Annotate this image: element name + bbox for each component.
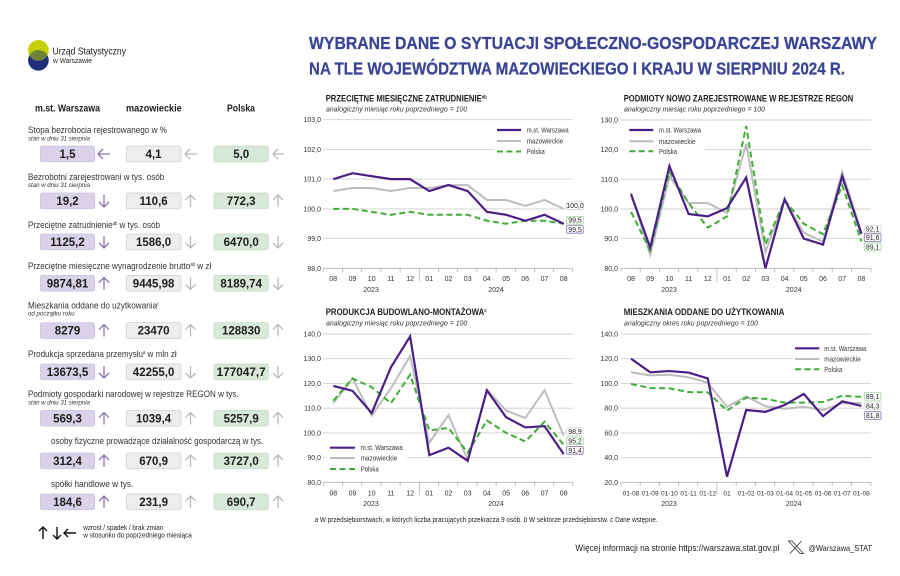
row: bezrobotni zarejestrowani (28, 172, 283, 209)
chart: produkcja budowlano-montażowa: 07 (541, 490, 548, 497)
chart: podmioty nowo zarejestrowane: 07 (838, 276, 846, 283)
row: osoby fizyczne: 312,4 (53, 456, 82, 468)
chart: produkcja budowlano-montażowa: mazowieckie (361, 454, 397, 462)
chart: przeciętne miesięczne zatrudnienie: 102,0 (303, 147, 321, 154)
row: osoby fizyczne: 3727,0 (224, 456, 259, 468)
chart: produkcja budowlano-montażowa: 98,9 (568, 429, 582, 436)
chart: mieszkania oddane do użytkowania: Polska (824, 365, 843, 374)
row: produkcja sprzedana przemysłu: a (143, 350, 145, 356)
chart: mieszkania oddane do użytkowania: 01-03 (757, 490, 774, 497)
column headers (35, 103, 255, 114)
chart: mieszkania oddane do użytkowania: 01-02 (738, 490, 755, 497)
chart: mieszkania oddane do użytkowania: 120,0 (600, 356, 618, 363)
chart: mieszkania oddane do użytkowania: 89,1 (866, 394, 880, 401)
chart: mieszkania oddane do użytkowania: 2023 (661, 501, 677, 508)
chart: podmioty nowo zarejestrowane: 12 (704, 276, 712, 283)
row: wynagrodzenie brutto: 9874,81 (47, 278, 89, 290)
chart: produkcja budowlano-montażowa: 100,0 (303, 430, 321, 437)
arrow legend (39, 525, 192, 540)
column headers: mazowieckie (126, 103, 182, 114)
row: podmioty gospodarki narodowej (28, 389, 283, 426)
chart: przeciętne miesięczne zatrudnienie: 04 (483, 276, 491, 283)
chart: podmioty nowo zarejestrowane: Polska (659, 147, 678, 156)
row: mieszkania oddane: od początku roku (28, 311, 75, 318)
chart: podmioty nowo zarejestrowane: 11 (685, 276, 692, 283)
chart: mieszkania oddane do użytkowania: 01-04 (776, 490, 793, 497)
chart: produkcja budowlano-montażowa: 91,4 (568, 448, 582, 455)
row: przeciętne zatrudnienie (28, 220, 283, 250)
chart: produkcja budowlano-montażowa: 03 (464, 490, 472, 497)
chart: podmioty nowo zarejestrowane: 100,0 (600, 206, 618, 214)
chart: przeciętne miesięczne zatrudnienie: analogiczny miesiąc roku poprzedniego = 100 (326, 105, 468, 114)
chart: mieszkania oddane do użytkowania: 140,0 (600, 332, 618, 338)
chart: przeciętne miesięczne zatrudnienie: 09 (349, 276, 356, 283)
footnotes: a W przedsiębiorstwach, w których liczba pracujących przekracza 9 osób. b W sektorze przedsiębiorstw. c Dane wstępne. (315, 517, 658, 524)
chart: podmioty nowo zarejestrowane: mazowieckie (659, 137, 696, 146)
chart: przeciętne miesięczne zatrudnienie: 98,0 (307, 266, 321, 273)
logo: Urząd Statystyczny w Warszawie: w Warszawie (52, 58, 92, 65)
logo: Urząd Statystyczny w Warszawie: Urząd Statystyczny (52, 46, 127, 58)
chart: przeciętne miesięczne zatrudnienie: 05 (502, 276, 510, 283)
chart: przeciętne miesięczne zatrudnienie: PRZECIĘTNE MIESIĘCZNE ZATRUDNIENIE (326, 94, 509, 104)
chart: produkcja budowlano-montażowa: 130,0 (303, 356, 321, 363)
chart: mieszkania oddane do użytkowania: m.st. Warszawa (824, 344, 867, 353)
chart: przeciętne miesięczne zatrudnienie (303, 94, 584, 294)
chart: przeciętne miesięczne zatrudnienie: 101,0 (303, 177, 321, 184)
row: przeciętne zatrudnienie: 1586,0 (136, 237, 171, 249)
row: wynagrodzenie brutto (28, 261, 283, 291)
row: spółki handlowe: spółki handlowe w tys. (51, 479, 133, 490)
row: bezrobotni zarejestrowani: 19,2 (56, 196, 79, 208)
chart: przeciętne miesięczne zatrudnienie: 99,5 (568, 218, 582, 225)
chart: przeciętne miesięczne zatrudnienie: 103,0 (303, 117, 321, 124)
chart: produkcja budowlano-montażowa: 04 (483, 490, 491, 497)
row: bezrobotni zarejestrowani: 110,6 (140, 196, 168, 208)
chart: produkcja budowlano-montażowa: 90,0 (307, 455, 321, 462)
row: produkcja sprzedana przemysłu (28, 349, 283, 380)
row: stopa bezrobocia (28, 125, 284, 162)
chart: przeciętne miesięczne zatrudnienie: mazowieckie (527, 136, 563, 146)
chart: produkcja budowlano-montażowa (303, 307, 583, 508)
chart: mieszkania oddane do użytkowania: 01-10 (661, 490, 678, 497)
chart: podmioty nowo zarejestrowane: 05 (800, 276, 808, 283)
chart: mieszkania oddane do użytkowania: 84,3 (866, 403, 880, 410)
chart: mieszkania oddane do użytkowania: 01-08 (853, 490, 870, 497)
row: stopa bezrobocia: Stopa bezrobocia rejestrowanego w % (28, 125, 167, 136)
row: przeciętne zatrudnienie: 1125,2 (50, 237, 85, 249)
chart: mieszkania oddane do użytkowania: 81,8 (866, 413, 880, 420)
chart: produkcja budowlano-montażowa: m.st. Warszawa (361, 443, 403, 452)
chart: produkcja budowlano-montażowa: 08 (560, 490, 568, 497)
row: przeciętne zatrudnienie: 6470,0 (224, 237, 259, 249)
social handle: @Warszawa_STAT (808, 543, 872, 553)
chart: mieszkania oddane do użytkowania: 01 (723, 490, 731, 497)
row: stopa bezrobocia: 5,0 (233, 149, 249, 161)
row: produkcja sprzedana przemysłu: 13673,5 (47, 367, 89, 379)
chart: mieszkania oddane do użytkowania: 60,0 (604, 430, 618, 437)
chart: podmioty nowo zarejestrowane: 120,0 (600, 147, 618, 154)
chart: podmioty nowo zarejestrowane: 91,6 (866, 235, 880, 242)
chart: podmioty nowo zarejestrowane: 10 (666, 276, 673, 283)
chart: mieszkania oddane do użytkowania: 01-09 (642, 490, 659, 497)
chart: mieszkania oddane do użytkowania: 2024 (786, 501, 802, 508)
row: mieszkania oddane: 8279 (55, 326, 80, 338)
icon: X logo (788, 541, 804, 554)
chart: podmioty nowo zarejestrowane (600, 94, 881, 294)
chart: produkcja budowlano-montażowa: 10 (368, 490, 376, 497)
row: przeciętne zatrudnienie: ab (113, 221, 117, 227)
chart: produkcja budowlano-montażowa: analogiczny miesiąc roku poprzedniego = 100 (326, 318, 468, 327)
chart: podmioty nowo zarejestrowane: 89,1 (866, 244, 880, 251)
chart: przeciętne miesięczne zatrudnienie: 2024 (488, 287, 504, 294)
chart: produkcja budowlano-montażowa: 09 (349, 490, 356, 497)
row: osoby fizyczne: osoby fizyczne prowadzące działalność gospodarczą w tys. (51, 436, 263, 447)
chart: podmioty nowo zarejestrowane: 2023 (661, 287, 677, 294)
chart: produkcja budowlano-montażowa: 05 (502, 490, 510, 497)
row: mieszkania oddane: 23470 (138, 326, 170, 338)
chart: przeciętne miesięczne zatrudnienie: 2023 (363, 287, 379, 294)
chart: mieszkania oddane do użytkowania: MIESZKANIA ODDANE DO UŻYTKOWANIA (624, 307, 785, 317)
chart: podmioty nowo zarejestrowane: PODMIOTY NOWO ZAREJESTROWANE W REJESTRZE REGON (624, 94, 853, 104)
row: wynagrodzenie brutto: ab (190, 262, 195, 268)
chart: przeciętne miesięczne zatrudnienie: 99,5 (568, 227, 582, 234)
row: wynagrodzenie brutto: Przeciętne miesięczne wynagrodzenie brutto (28, 261, 218, 272)
chart: mieszkania oddane do użytkowania: 40,0 (604, 455, 618, 462)
row: bezrobotni zarejestrowani: 772,3 (227, 196, 256, 208)
row: mieszkania oddane: c (157, 302, 160, 308)
chart: podmioty nowo zarejestrowane: 04 (781, 276, 789, 283)
chart: mieszkania oddane do użytkowania: 20,0 (604, 480, 618, 487)
chart: produkcja budowlano-montażowa: c (484, 308, 487, 314)
chart: przeciętne miesięczne zatrudnienie: 06 (521, 276, 529, 283)
chart: podmioty nowo zarejestrowane: 2024 (786, 287, 802, 294)
row: spółki handlowe: 184,6 (53, 497, 82, 509)
row: produkcja sprzedana przemysłu: w mln zł (145, 349, 177, 360)
chart: przeciętne miesięczne zatrudnienie: ab (482, 95, 487, 101)
chart: produkcja budowlano-montażowa: 12 (406, 490, 414, 497)
row: bezrobotni zarejestrowani: stan w dniu 31 sierpnia (28, 182, 90, 189)
chart: podmioty nowo zarejestrowane: 92,1 (866, 227, 880, 234)
chart: produkcja budowlano-montażowa: 80,0 (307, 480, 321, 487)
chart: podmioty nowo zarejestrowane: 90,0 (604, 236, 618, 243)
chart: mieszkania oddane do użytkowania: 100,0 (600, 381, 618, 388)
row: spółki handlowe: 690,7 (227, 497, 256, 509)
chart: mieszkania oddane do użytkowania: 80,0 (604, 406, 618, 413)
row: podmioty gospodarki narodowej: 569,3 (53, 413, 82, 425)
chart: mieszkania oddane do użytkowania: 01-11 (680, 490, 697, 497)
chart: produkcja budowlano-montażowa: 2024 (488, 501, 504, 508)
chart: produkcja budowlano-montażowa: 140,0 (303, 332, 321, 338)
chart: podmioty nowo zarejestrowane: 03 (762, 276, 769, 283)
chart: podmioty nowo zarejestrowane: m.st. Warszawa (659, 126, 702, 134)
chart: przeciętne miesięczne zatrudnienie: 08 (329, 276, 337, 283)
chart: mieszkania oddane do użytkowania: 01-06 (815, 490, 832, 497)
row: mieszkania oddane (28, 301, 283, 338)
chart: podmioty nowo zarejestrowane: 09 (646, 276, 654, 283)
chart: produkcja budowlano-montażowa: 11 (387, 490, 395, 497)
row: stopa bezrobocia: 4,1 (146, 149, 162, 161)
chart: produkcja budowlano-montażowa: PRODUKCJA BUDOWLANO-MONTAŻOWA (326, 307, 508, 317)
row: podmioty gospodarki narodowej: 5257,9 (224, 413, 259, 425)
chart: podmioty nowo zarejestrowane: 80,0 (604, 266, 618, 273)
chart: produkcja budowlano-montażowa: 08 (329, 490, 337, 497)
row: podmioty gospodarki narodowej: 1039,4 (136, 413, 172, 425)
chart: podmioty nowo zarejestrowane: 110,0 (601, 177, 618, 184)
chart: przeciętne miesięczne zatrudnienie: 11 (387, 276, 395, 283)
chart: przeciętne miesięczne zatrudnienie: 99,0 (307, 236, 321, 243)
chart: mieszkania oddane do użytkowania: 01-12 (699, 490, 717, 497)
chart: przeciętne miesięczne zatrudnienie: 10 (368, 276, 376, 283)
column headers: m.st. Warszawa (35, 103, 100, 114)
chart: przeciętne miesięczne zatrudnienie: m.st. Warszawa (527, 126, 569, 134)
row: osoby fizyczne: 670,9 (139, 456, 168, 468)
row: produkcja sprzedana przemysłu: 42255,0 (133, 367, 174, 379)
chart: produkcja budowlano-montażowa: 06 (521, 490, 529, 497)
row: produkcja sprzedana przemysłu: Produkcja sprzedana przemysłu (28, 349, 165, 360)
chart: produkcja budowlano-montażowa: 2023 (363, 501, 379, 508)
row: podmioty gospodarki narodowej: stan w dniu 31 sierpnia (28, 400, 90, 407)
chart: mieszkania oddane do użytkowania: 01-07 (834, 490, 851, 497)
row: mieszkania oddane: Mieszkania oddane do użytkowania (28, 301, 179, 312)
chart: mieszkania oddane do użytkowania: analogiczny okres roku poprzedniego = 100 (624, 318, 759, 327)
chart: produkcja budowlano-montażowa: 110,0 (304, 406, 321, 413)
arrow legend: w stosunku do poprzedniego miesiąca (82, 532, 192, 540)
chart: produkcja budowlano-montażowa: 120,0 (303, 381, 321, 388)
chart: podmioty nowo zarejestrowane: 01 (723, 276, 731, 283)
row: bezrobotni zarejestrowani: Bezrobotni zarejestrowani w tys. osób (28, 172, 164, 183)
row: wynagrodzenie brutto: 9445,98 (133, 278, 175, 290)
chart: przeciętne miesięczne zatrudnienie: 08 (560, 276, 568, 283)
chart: przeciętne miesięczne zatrudnienie: 01 (425, 276, 433, 283)
column headers: Polska (227, 103, 255, 114)
chart: mieszkania oddane do użytkowania: 01-05 (795, 490, 813, 497)
chart: podmioty nowo zarejestrowane: 130,0 (600, 118, 618, 124)
title (309, 33, 877, 78)
chart: przeciętne miesięczne zatrudnienie: 100,0 (566, 203, 584, 210)
chart: produkcja budowlano-montażowa: Polska (361, 464, 379, 474)
chart: podmioty nowo zarejestrowane: 08 (858, 276, 865, 283)
chart: mieszkania oddane do użytkowania (600, 307, 881, 508)
row: podmioty gospodarki narodowej: Podmioty gospodarki narodowej w rejestrze REGON w tys. (28, 389, 239, 400)
row: stopa bezrobocia: stan w dniu 31 sierpnia (28, 136, 90, 142)
chart: produkcja budowlano-montażowa: 01 (425, 490, 433, 497)
row: produkcja sprzedana przemysłu: 177047,7 (217, 367, 266, 379)
chart: produkcja budowlano-montażowa: 02 (445, 490, 452, 497)
chart: przeciętne miesięczne zatrudnienie: 12 (406, 276, 414, 283)
chart: podmioty nowo zarejestrowane: 08 (627, 276, 635, 283)
chart: produkcja budowlano-montażowa: 95,2 (568, 438, 582, 445)
chart: przeciętne miesięczne zatrudnienie: Polska (527, 147, 545, 156)
row: osoby fizyczne (40, 436, 283, 469)
chart: mieszkania oddane do użytkowania: 01-08 (623, 490, 640, 497)
footer link: Więcej informacji na stronie https://warszawa.stat.gov.pl (575, 543, 779, 554)
panel: indicators table (28, 125, 284, 510)
chart: przeciętne miesięczne zatrudnienie: 03 (464, 276, 472, 283)
chart: przeciętne miesięczne zatrudnienie: 02 (445, 276, 452, 283)
row: przeciętne zatrudnienie: w tys. osób (117, 220, 160, 231)
chart: przeciętne miesięczne zatrudnienie: 100,0 (303, 206, 321, 213)
chart: podmioty nowo zarejestrowane: 02 (742, 276, 750, 283)
chart: przeciętne miesięczne zatrudnienie: 07 (541, 276, 548, 283)
row: stopa bezrobocia: 1,5 (60, 149, 76, 161)
row: wynagrodzenie brutto: 8189,74 (220, 278, 263, 290)
row: przeciętne zatrudnienie: Przeciętne zatrudnienie (28, 220, 128, 231)
row: spółki handlowe (40, 479, 283, 510)
row: wynagrodzenie brutto: w zł (195, 261, 212, 272)
chart: podmioty nowo zarejestrowane: 06 (819, 276, 827, 283)
logo: Urząd Statystyczny w Warszawie (28, 40, 127, 71)
arrow legend: wzrost / spadek / brak zmian (82, 525, 163, 532)
chart: podmioty nowo zarejestrowane: analogiczny miesiąc roku poprzedniego = 100 (624, 105, 766, 114)
row: spółki handlowe: 231,9 (139, 497, 168, 509)
chart: mieszkania oddane do użytkowania: mazowieckie (824, 354, 861, 364)
row: mieszkania oddane: 128830 (222, 326, 260, 338)
